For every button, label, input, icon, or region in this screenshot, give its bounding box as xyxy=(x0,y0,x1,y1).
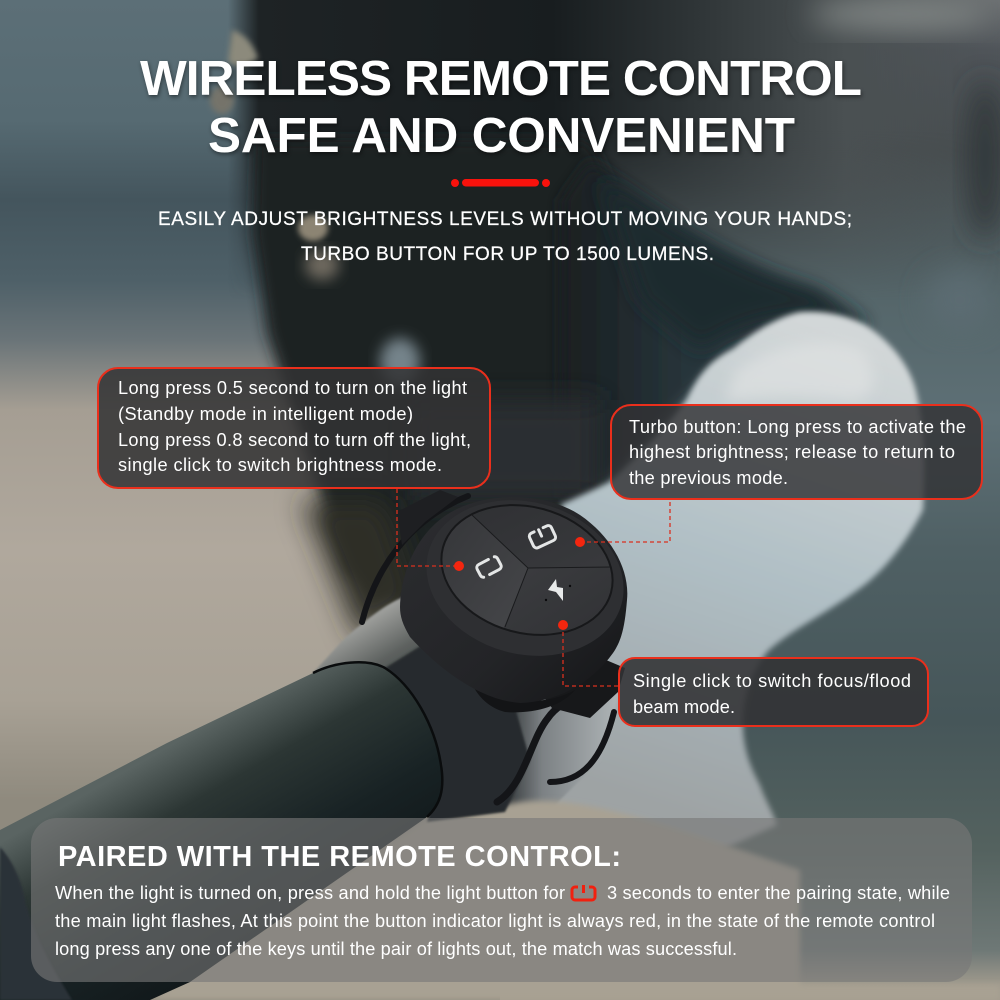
panel heading: PAIRED WITH THE REMOTE CONTROL: xyxy=(58,841,621,873)
panel body text: long press any one of the keys until the pair of lights out, the match was successful. xyxy=(55,939,737,959)
callout: power button: Long press 0.8 second to turn off the light, xyxy=(118,430,471,450)
callout: beam mode: Single click to switch focus/flood xyxy=(633,671,911,691)
handlebar section below device xyxy=(500,690,620,840)
button: top xyxy=(473,506,610,568)
panel body text: When the light is turned on, press and hold the light button for xyxy=(55,883,565,903)
lower strap clip xyxy=(540,660,625,718)
callout: beam mode: beam mode. xyxy=(633,697,735,717)
icon: lightning bolt xyxy=(548,579,563,601)
callout: power button: Long press 0.5 second to turn on the light xyxy=(118,378,467,398)
icon: power xyxy=(528,524,557,549)
leader line: turbo button xyxy=(580,499,670,542)
subtitle xyxy=(158,209,852,265)
button segments xyxy=(442,506,612,634)
sleeve cuff xyxy=(560,160,870,500)
bar end cap xyxy=(0,847,72,1000)
title xyxy=(140,51,862,163)
subtitle: EASILY ADJUST BRIGHTNESS LEVELS WITHOUT MOVING YOUR HANDS; xyxy=(158,209,852,230)
outer housing skirt xyxy=(400,497,627,703)
panel body text: 3 seconds to enter the pairing state, while xyxy=(607,883,950,903)
button: left xyxy=(442,516,528,628)
panel body text: the main light flashes, At this point the button indicator light is always red, in the state of the remote control xyxy=(55,911,935,931)
callout: turbo button: the previous mode. xyxy=(629,468,788,488)
callout: power button xyxy=(98,368,490,488)
callout: beam mode xyxy=(619,658,928,726)
remote control device xyxy=(359,490,628,806)
leader line: power/mode button xyxy=(397,489,459,566)
button groove xyxy=(425,485,629,655)
callout: turbo button xyxy=(611,405,982,499)
lower base lobes xyxy=(470,680,575,712)
subtitle: TURBO BUTTON FOR UP TO 1500 LUMENS. xyxy=(301,244,714,265)
silver handlebar collar xyxy=(313,597,440,687)
callout: turbo button: Turbo button: Long press to activate the xyxy=(629,417,966,437)
title: SAFE AND CONVENIENT xyxy=(208,108,795,163)
callout: turbo button: highest brightness; release to return to xyxy=(629,442,955,462)
icon: red power button xyxy=(572,885,595,900)
callout: power button: (Standby mode in intelligent mode) xyxy=(118,404,413,424)
panel: pairing instructions xyxy=(31,818,972,982)
marker dot: beam button xyxy=(558,620,568,630)
panel body text xyxy=(55,883,950,959)
carbon handlebar grip xyxy=(0,662,442,1000)
housing rim xyxy=(409,479,641,677)
mount strap xyxy=(362,496,618,802)
leader line: beam button xyxy=(563,625,619,686)
marker dot: turbo button xyxy=(575,537,585,547)
icon: cycle mode xyxy=(476,555,502,579)
upper dark mass xyxy=(231,0,926,270)
metal lever highlights xyxy=(228,30,258,68)
beige ground under the handlebar xyxy=(150,801,1000,1000)
red divider xyxy=(451,179,550,187)
callout: power button: single click to switch brightness mode. xyxy=(118,455,442,475)
white glove xyxy=(500,312,924,860)
upper strap clip xyxy=(397,490,458,545)
title: WIRELESS REMOTE CONTROL xyxy=(140,51,862,106)
shadow left of the device xyxy=(302,500,420,640)
marker dot: power/mode button xyxy=(454,561,464,571)
button: bottom xyxy=(504,568,612,634)
dark sleeve silhouette xyxy=(253,140,610,620)
dark bar between grip and device xyxy=(385,640,530,822)
